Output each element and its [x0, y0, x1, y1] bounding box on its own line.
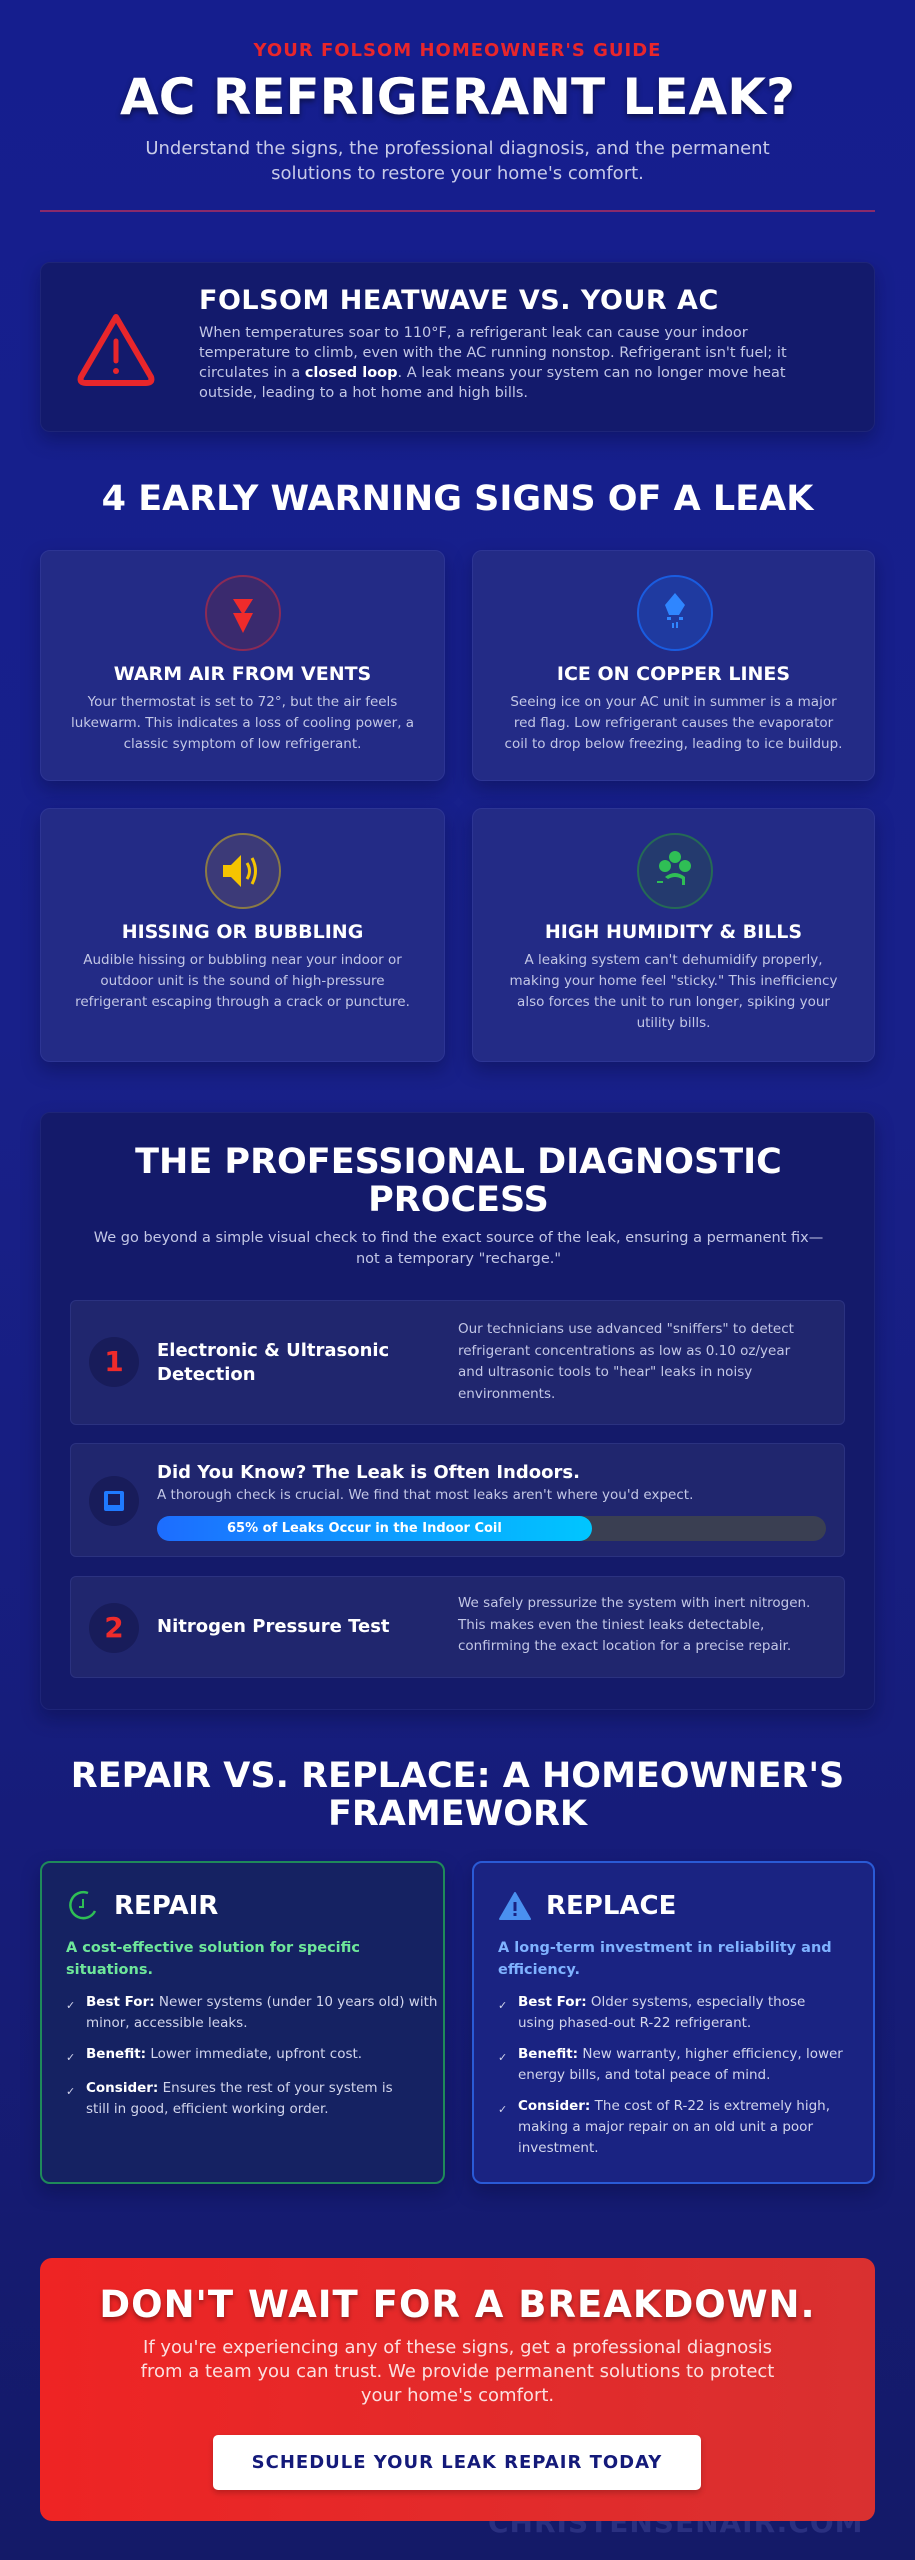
CTA text: If you're experiencing any of these signs, get a professional diagnosis from a team you can trust. We provide permanent solutions to protect your home's comfort.	[141, 2337, 774, 2406]
heading	[135, 1142, 782, 1220]
heading: Did You Know? The Leak is Often Indoors.	[157, 1462, 580, 1483]
panel: replace: Benefit: New warranty, higher efficiency, lower energy bills, and total peace of mind.	[518, 2046, 843, 2083]
icon: warning triangle	[78, 314, 154, 386]
heading: PROCESS	[368, 1180, 549, 1220]
CTA heading: DON'T WAIT FOR A BREAKDOWN.	[99, 2283, 816, 2326]
heading: repair vs replace: REPAIR VS. REPLACE: A HOMEOWNER'S	[71, 1756, 844, 1796]
eyebrow label: YOUR FOLSOM HOMEOWNER'S GUIDE	[254, 40, 661, 61]
list: Best For: Older systems, especially those using phased-out R-22 refrigerant.	[518, 1994, 805, 2031]
icon: warning	[499, 1892, 531, 1920]
card: hissing	[40, 808, 445, 1062]
panel: heatwave	[40, 262, 875, 432]
text: A thorough check is crucial. We find that most leaks aren't where you'd expect.	[157, 1487, 693, 1503]
title: ICE ON COPPER LINES	[557, 663, 790, 685]
panel: replace: Consider: The cost of R-22 is extremely high, making a major repair on an old unit a poor investment.	[518, 2098, 830, 2156]
number badge	[89, 1337, 139, 1387]
button: SCHEDULE YOUR LEAK REPAIR TODAY	[252, 2452, 662, 2473]
panel: replace	[472, 1861, 875, 2184]
CTA panel	[40, 2258, 875, 2521]
description: not a temporary "recharge."	[356, 1251, 561, 1267]
text: Your thermostat is set to 72°, but the air feels lukewarm. This indicates a loss of cooling power, a classic symptom of low refrigerant.	[71, 694, 414, 752]
step 1	[70, 1300, 845, 1425]
step title: Electronic & Ultrasonic	[157, 1340, 389, 1361]
heading: THE PROFESSIONAL DIAGNOSTIC	[135, 1142, 782, 1182]
title: REPLACE	[546, 1891, 676, 1921]
heading: warning signs: 4 EARLY WARNING SIGNS OF A LEAK	[102, 479, 813, 519]
card: ice	[472, 550, 875, 781]
title: WARM AIR FROM VENTS	[114, 663, 371, 685]
subtitle: Understand the signs, the professional diagnosis, and the permanent solutions to restore your home's comfort.	[145, 138, 770, 184]
step title	[157, 1340, 389, 1385]
title: AC REFRIGERANT LEAK?	[120, 68, 795, 126]
icon: speaker	[205, 833, 281, 909]
step text: We safely pressurize the system with inert nitrogen. This makes even the tiniest leaks detectable, confirming the exact location for a precise repair.	[458, 1595, 810, 1654]
list: Best For: Newer systems (under 10 years old) with minor, accessible leaks.	[86, 1994, 437, 2031]
heading: repair vs replace	[71, 1756, 844, 1834]
text: Audible hissing or bubbling near your indoor or outdoor unit is the sound of high-pressure refrigerant escaping through a crack or puncture.	[75, 952, 410, 1010]
icon: repair clock	[69, 1890, 96, 1920]
step title: Detection	[157, 1364, 256, 1385]
panel: repair: Consider: Ensures the rest of your system is still in good, efficient working order.	[86, 2080, 393, 2117]
icon: warm air arrows	[205, 575, 281, 651]
icon: humidity	[637, 833, 713, 909]
step 2	[70, 1576, 845, 1678]
number badge: 2	[104, 1611, 124, 1644]
progress bar 65%	[157, 1516, 826, 1541]
panel: diagnostic process	[40, 1112, 875, 1710]
title: HIGH HUMIDITY & BILLS	[545, 921, 802, 943]
step title: Nitrogen Pressure Test	[157, 1616, 390, 1637]
title: HISSING OR BUBBLING	[122, 921, 363, 943]
description	[94, 1230, 823, 1267]
watermark: CHRISTENSENAIR.COM	[488, 2506, 864, 2539]
heading: FOLSOM HEATWAVE VS. YOUR AC	[199, 285, 719, 316]
panel: repair: Benefit: Lower immediate, upfront cost.	[86, 2046, 362, 2062]
body text: When temperatures soar to 110°F, a refrigerant leak can cause your indoor temperature to climb, even with the AC running nonstop. Refrigerant isn't fuel; it circulates in a closed loop. A leak means your system can no longer move heat outside, leading to a hot home and high bills.	[199, 325, 787, 401]
did you know box	[70, 1443, 845, 1557]
panel: repair	[40, 1861, 445, 2184]
heading: repair vs replace: FRAMEWORK	[328, 1794, 587, 1834]
progress bar 65%: 65% of Leaks Occur in the Indoor Coil	[227, 1521, 502, 1536]
text: A leaking system can't dehumidify properly, making your home feel "sticky." This inefficiency also forces the unit to run longer, spiking your utility bills.	[510, 952, 837, 1031]
title: REPAIR	[114, 1891, 218, 1921]
card: humidity	[472, 808, 875, 1062]
icon: indoor unit	[89, 1476, 139, 1526]
step text: Our technicians use advanced "sniffers" to detect refrigerant concentrations as low as 0.10 oz/year and ultrasonic tools to "hear" leaks in noisy environments.	[458, 1321, 794, 1402]
icon: ice	[637, 575, 713, 651]
text: Seeing ice on your AC unit in summer is a major red flag. Low refrigerant causes the evaporator coil to drop below freezing, leading to ice buildup.	[505, 694, 842, 752]
button	[213, 2435, 701, 2490]
description: We go beyond a simple visual check to find the exact source of the leak, ensuring a permanent fix—	[94, 1230, 823, 1246]
number badge	[89, 1603, 139, 1653]
card: warm air	[40, 550, 445, 781]
tagline: A cost-effective solution for specific situations.	[66, 1940, 360, 1978]
tagline: A long-term investment in reliability and efficiency.	[498, 1940, 832, 1978]
number badge: 1	[104, 1345, 124, 1378]
